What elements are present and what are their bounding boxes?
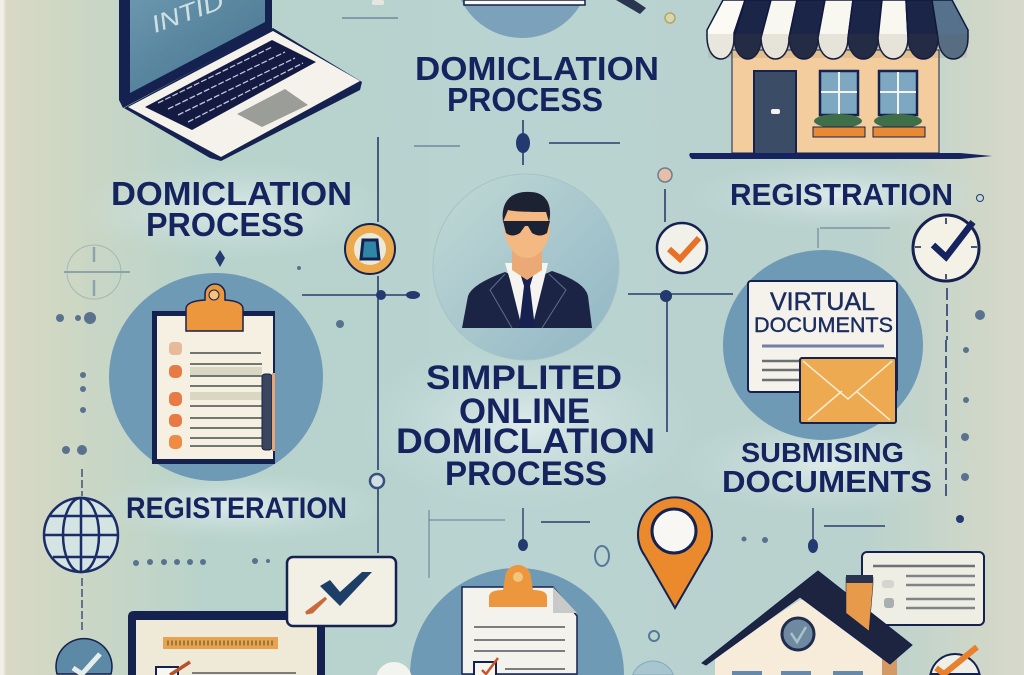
small dotted marks bbox=[56, 266, 985, 566]
title: simplified online domiciliation process: PROCESS bbox=[445, 455, 607, 493]
tie bbox=[519, 276, 535, 328]
heading: registeration left: REGISTERATION bbox=[126, 492, 347, 525]
awning bbox=[707, 0, 968, 59]
shirt bbox=[505, 263, 548, 328]
building bbox=[732, 50, 939, 153]
icon: check circle bbox=[657, 168, 707, 273]
title: simplified online domiciliation process: DOMICLATION bbox=[396, 422, 655, 461]
trackpad bbox=[237, 89, 308, 127]
heading: submitting documents: DOCUMENTS bbox=[722, 464, 932, 499]
chimney bbox=[846, 577, 873, 631]
ground line bbox=[689, 153, 992, 159]
info card bbox=[862, 552, 984, 625]
small teardrop marks bbox=[595, 546, 659, 641]
documents circle: VIRTUAL bbox=[770, 288, 875, 316]
soft glow behind labels bbox=[70, 160, 990, 542]
title: simplified online domiciliation process: ONLINE bbox=[459, 392, 590, 431]
heading: top center bbox=[415, 50, 659, 118]
neck and head bbox=[512, 245, 542, 280]
suit bbox=[462, 271, 592, 328]
small sphere bbox=[632, 661, 674, 675]
laptop bbox=[119, 0, 362, 161]
clipboard circle bbox=[109, 273, 323, 481]
clip bbox=[489, 565, 547, 607]
lower windows bbox=[732, 671, 762, 675]
virtual documents card bbox=[748, 281, 897, 392]
form header bar bbox=[163, 637, 278, 649]
lapel outlines bbox=[490, 274, 566, 328]
heading: left bbox=[111, 175, 352, 243]
envelope bbox=[800, 358, 896, 423]
page bbox=[462, 587, 577, 674]
title: simplified online domiciliation process: SIMPLITED bbox=[426, 359, 622, 397]
bottom center circle with checklist bbox=[410, 565, 624, 675]
sunglasses bbox=[503, 221, 550, 236]
documents circle bbox=[723, 250, 923, 440]
icon: clock with check bbox=[913, 195, 983, 281]
laptop screen bbox=[119, 0, 272, 108]
roof bbox=[702, 571, 912, 665]
heading: submitting documents: SUBMISING bbox=[741, 437, 904, 468]
round window bbox=[782, 618, 814, 650]
documents circle: DOCUMENTS bbox=[754, 314, 893, 337]
lines bbox=[474, 627, 565, 651]
heading: registration right: REGISTRATION bbox=[730, 177, 953, 212]
house bbox=[702, 571, 912, 675]
heading: top center: PROCESS bbox=[447, 81, 603, 118]
person bbox=[462, 192, 592, 328]
monitor form bbox=[128, 611, 325, 675]
heading: left: DOMICLATION bbox=[111, 175, 352, 212]
form row bbox=[156, 667, 178, 675]
icon: blue check circle bbox=[56, 639, 112, 674]
icon: location pin bbox=[638, 497, 712, 608]
flower boxes bbox=[813, 114, 925, 137]
connector lines bbox=[82, 18, 947, 632]
clip bbox=[186, 284, 243, 331]
icon: orange badge bbox=[345, 224, 395, 274]
laptop base bbox=[124, 28, 362, 161]
pen bbox=[262, 374, 272, 450]
keyboard bbox=[145, 40, 316, 130]
title: simplified online domiciliation process bbox=[396, 359, 655, 493]
connector nodes bbox=[215, 133, 984, 553]
hair bbox=[503, 192, 550, 222]
check card bbox=[287, 557, 396, 626]
icon: pencil check circle bbox=[930, 647, 980, 674]
small bubble bbox=[377, 662, 411, 675]
storefront bbox=[689, 0, 992, 159]
clipboard bbox=[152, 311, 275, 464]
door bbox=[754, 71, 796, 154]
central person circle bbox=[433, 174, 619, 360]
walls bbox=[715, 600, 890, 675]
heading: left: PROCESS bbox=[146, 206, 304, 243]
heading: submitting documents bbox=[722, 437, 932, 499]
faint compass mark bbox=[64, 245, 130, 299]
icon: globe bbox=[44, 498, 118, 572]
heading: top center: DOMICLATION bbox=[415, 50, 659, 87]
top center circle with document bbox=[372, 0, 675, 38]
windows bbox=[820, 71, 917, 115]
checklist bbox=[169, 342, 182, 449]
icon: small ring node bbox=[370, 474, 384, 488]
